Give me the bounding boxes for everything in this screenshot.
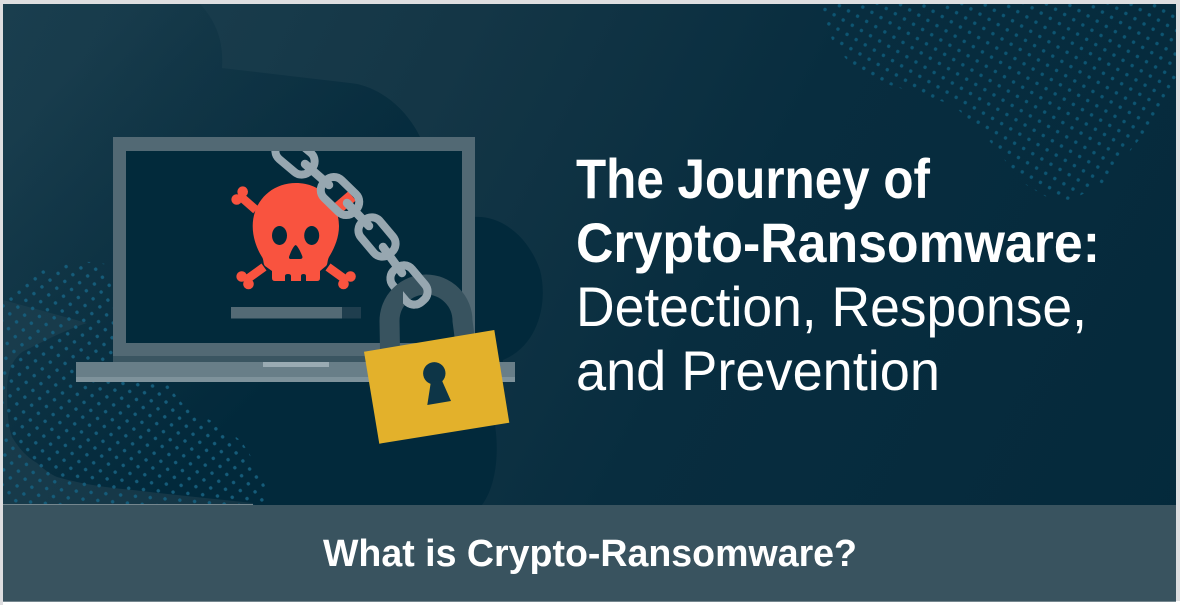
chain ring front (403, 261, 432, 309)
padlock body (364, 330, 509, 444)
title: and Prevention (576, 339, 940, 402)
progress bar (231, 307, 361, 318)
laptop base (76, 362, 515, 377)
dark background blob (3, 72, 542, 505)
padlock shackle (390, 284, 465, 350)
padlock (364, 261, 509, 444)
title: Crypto-Ransomware: (576, 211, 1100, 274)
title bold lines: The Journey of (576, 147, 930, 210)
dot pattern: bottom left (3, 262, 268, 505)
title regular lines: Detection, Response, (576, 275, 1087, 338)
skull (253, 183, 339, 281)
laptop screen (126, 151, 462, 343)
bottom band (3, 504, 1176, 602)
chain edge links (305, 164, 402, 273)
laptop illustration (76, 137, 515, 382)
laptop notch (263, 362, 329, 367)
padlock keyhole (423, 362, 451, 405)
dot pattern: top right (820, 4, 1176, 200)
chain link rings (271, 151, 432, 309)
icon: skull and crossbones (231, 183, 356, 289)
title (576, 147, 1100, 402)
laptop hinge (113, 356, 475, 362)
chain (271, 151, 432, 309)
bones (240, 196, 352, 280)
band heading: What is Crypto-Ransomware? (323, 533, 857, 575)
laptop screen frame (113, 137, 475, 356)
skull eyes and nose (272, 226, 319, 259)
